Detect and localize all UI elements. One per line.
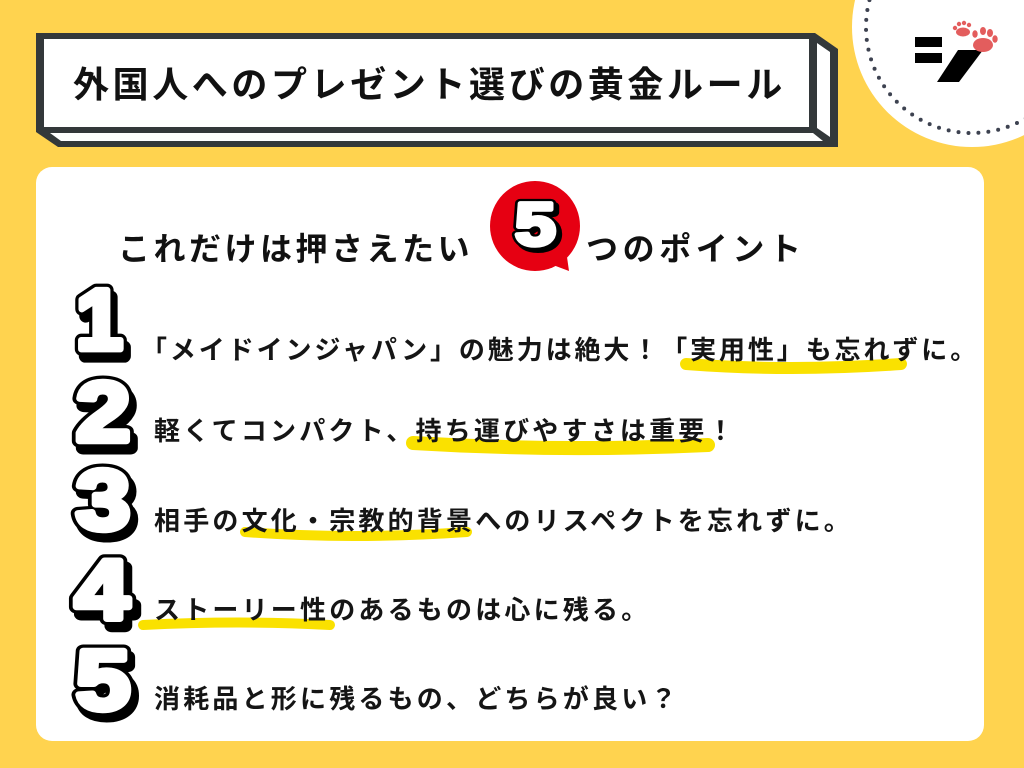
point 4: 4 xyxy=(80,551,135,644)
point 4 text: ストーリー性のあるものは心に残る。 xyxy=(154,595,650,625)
point 2 xyxy=(76,366,737,466)
title banner xyxy=(36,33,838,147)
point 5: 5 xyxy=(76,634,130,727)
point 4 xyxy=(75,544,650,644)
title: 外国人へのプレゼント選びの黄金ルール xyxy=(73,64,786,105)
point 3: 3 xyxy=(80,460,134,553)
point 2: 2 xyxy=(76,366,130,459)
subheading: これだけは押さえたい xyxy=(118,231,473,267)
point 5 text: 消耗品と形に残るもの、どちらが良い？ xyxy=(154,684,680,714)
point 4: 4 xyxy=(75,544,130,637)
point 1: 1 xyxy=(76,271,123,367)
main white panel xyxy=(36,167,984,741)
red speech bubble with 5: 5 xyxy=(518,194,559,261)
point 3 text: 相手の文化・宗教的背景へのリスペクトを忘れずに。 xyxy=(154,506,853,536)
highlights xyxy=(143,364,901,625)
point 2 text: 軽くてコンパクト、持ち運びやすさは重要！ xyxy=(154,416,737,446)
point 1 text: 「メイドインジャパン」の魅力は絶大！「実用性」も忘れずに。 xyxy=(141,335,979,365)
point 1: 1 xyxy=(76,271,123,367)
logo badge xyxy=(852,0,1024,147)
point 3: 3 xyxy=(76,454,130,547)
point 1 xyxy=(76,271,979,374)
point 5 xyxy=(76,634,680,733)
point 3 xyxy=(76,454,853,553)
point 2: 2 xyxy=(76,366,130,459)
red speech bubble with 5: 5 xyxy=(515,191,556,258)
point 5: 5 xyxy=(80,640,134,733)
subheading xyxy=(118,231,806,267)
point 2: 2 xyxy=(80,373,134,466)
red speech bubble with 5: 5 xyxy=(515,191,556,258)
point 4: 4 xyxy=(75,544,130,637)
point 3: 3 xyxy=(76,454,130,547)
red speech bubble with 5 xyxy=(490,181,580,271)
subheading: つのポイント xyxy=(586,231,806,267)
point 5: 5 xyxy=(76,634,130,727)
point 1: 1 xyxy=(80,278,127,374)
